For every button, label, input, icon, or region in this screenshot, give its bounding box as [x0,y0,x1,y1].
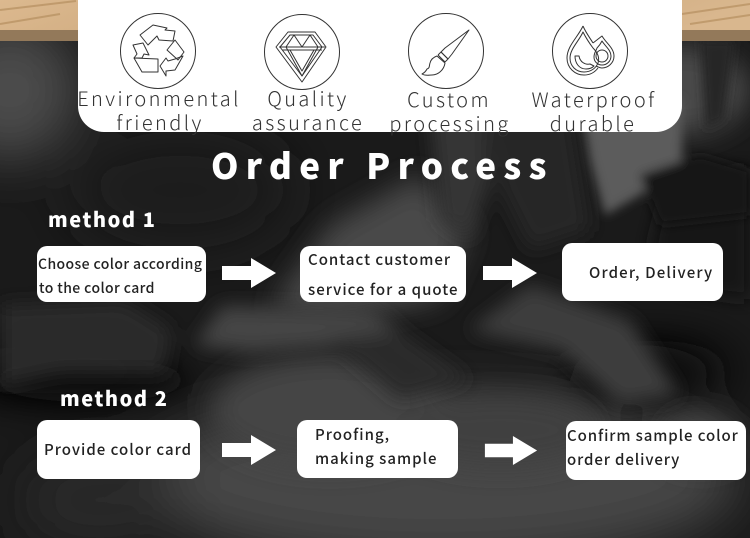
panel: product features [78,0,682,132]
label: quality assurance [252,83,364,136]
step: choose color: Choose color according [38,254,202,274]
step: order, delivery: Order, Delivery [589,262,713,283]
arrow [222,435,276,465]
step: contact customer service: Contact customer [308,249,451,270]
icon: water drops [552,13,628,89]
feature: waterproof durable [532,13,656,137]
feature: environmental friendly [77,13,241,136]
arrow [484,436,537,465]
feature: quality assurance [252,14,364,136]
step: order, delivery [562,243,723,301]
step: provide color card [37,420,200,479]
step: proofing, making sample: making sample [315,448,438,469]
step: contact customer service [300,246,466,302]
label: custom processing [389,84,511,137]
step: provide color card: Provide color card [44,439,192,460]
arrow [483,258,537,288]
label: quality assurance: Quality [267,83,349,112]
title: Order Process [211,139,554,190]
label: environmental friendly: friendly [116,107,204,136]
label: environmental friendly [77,83,241,136]
heading: method 2: method 2 [60,383,168,412]
step: choose color [37,246,206,302]
heading: method 1: method 1 [48,204,156,233]
label: environmental friendly: Environmental [77,83,241,112]
icon: recycle [120,13,196,89]
step: proofing, making sample [297,420,458,478]
step: proofing, making sample: Proofing, [315,424,390,445]
icon: diamond [264,14,340,90]
step: choose color: to the color card [39,278,155,298]
step: contact customer service: service for a quote [308,279,458,300]
label: waterproof durable: Waterproof [532,84,656,113]
icon: paint brush [408,13,484,89]
feature: custom processing [389,13,511,137]
step: confirm sample color: Confirm sample color [567,425,739,446]
label: quality assurance: assurance [252,107,364,136]
step: confirm sample color [566,421,746,480]
label: waterproof durable: durable [550,108,636,137]
label: waterproof durable [532,84,656,137]
step: confirm sample color: order delivery [567,449,680,470]
label: custom processing: Custom [407,84,491,113]
label: custom processing: processing [389,108,511,137]
wood table top [0,0,750,41]
arrow [222,258,276,288]
